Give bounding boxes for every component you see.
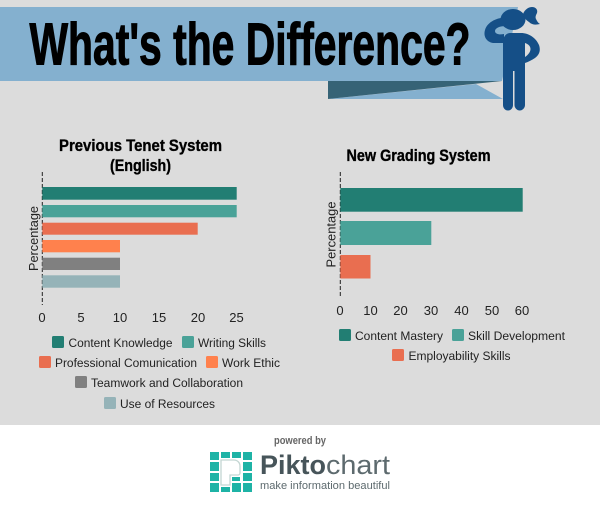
- y axis label: Percentage: [324, 202, 338, 268]
- bars: [42, 187, 237, 288]
- x axis ticks: 60: [515, 303, 529, 318]
- x axis ticks: 30: [424, 303, 438, 318]
- left chart heading: (English): [110, 156, 171, 175]
- left legend: [39, 336, 280, 411]
- left legend: Teamwork and Collaboration: [91, 376, 243, 390]
- piktochart wordmark: Pikto: [260, 450, 326, 480]
- x axis ticks: 10: [363, 303, 378, 318]
- right axis: [339, 172, 341, 298]
- y axis label: Percentage: [26, 206, 41, 271]
- x axis ticks: 20: [393, 303, 408, 318]
- right legend: [339, 329, 566, 363]
- powered by: powered by: [274, 435, 327, 447]
- left legend: Use of Resources: [120, 397, 215, 411]
- x axis ticks: 10: [113, 310, 127, 325]
- x axis ticks: 5: [77, 310, 85, 325]
- x axis ticks: 50: [485, 303, 499, 318]
- x axis ticks: 40: [454, 303, 469, 318]
- footer panel: [0, 425, 600, 505]
- left legend: Professional Comunication: [55, 356, 197, 370]
- piktochart wordmark: [260, 450, 391, 480]
- banner: [0, 7, 518, 99]
- icon: piktochart logo: [210, 452, 252, 492]
- x axis ticks: 20: [191, 310, 205, 325]
- right legend: Employability Skills: [408, 349, 510, 363]
- left chart heading: [59, 136, 222, 175]
- right legend: Content Mastery: [355, 329, 444, 343]
- x axis ticks: 0: [336, 303, 344, 318]
- x axis ticks: [336, 303, 529, 318]
- icon: thinking girl: [484, 7, 540, 110]
- left bar chart: [26, 172, 244, 325]
- x axis ticks: 0: [38, 310, 46, 325]
- piktochart wordmark: chart: [326, 450, 391, 480]
- left axis: [41, 172, 43, 305]
- right chart heading: New Grading System: [346, 146, 490, 165]
- right bar chart: [324, 172, 529, 318]
- left legend: Content Knowledge: [68, 336, 173, 350]
- x axis ticks: [38, 310, 244, 325]
- right legend: Skill Development: [468, 329, 566, 343]
- left legend: Writing Skills: [198, 336, 266, 350]
- x axis ticks: 15: [152, 310, 166, 325]
- bars: [340, 188, 523, 278]
- tagline: make information beautiful: [260, 480, 390, 492]
- left chart heading: Previous Tenet System: [59, 136, 222, 155]
- x axis ticks: 25: [229, 310, 244, 325]
- left legend: Work Ethic: [222, 356, 280, 370]
